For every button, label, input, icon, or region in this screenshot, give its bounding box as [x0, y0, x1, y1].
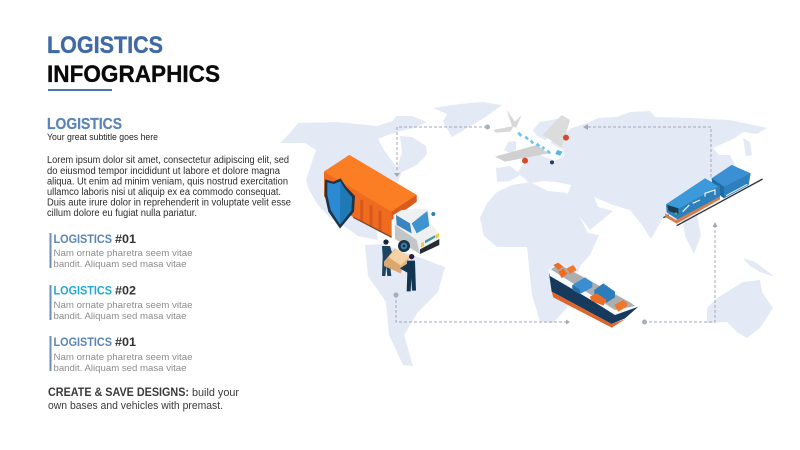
icon: shield	[325, 178, 355, 229]
engines	[563, 135, 569, 141]
map: africa	[480, 182, 599, 323]
list item 3: Nam ornate pharetra seem vitae	[54, 352, 192, 363]
icon: two workers with parcel	[382, 239, 416, 291]
list item 2	[50, 284, 192, 322]
list item 2: bandit. Aliquam sed masa vitae	[54, 311, 186, 322]
list item 2: #02	[115, 284, 136, 298]
list item 1: Nam ornate pharetra seem vitae	[54, 248, 192, 259]
route: top left dashed arrow	[394, 124, 490, 177]
body paragraph: aliqua. Ut enim ad minim veniam, quis nostrud exercitation	[47, 176, 288, 188]
fuselage	[515, 128, 564, 161]
icon: truck with shield	[324, 155, 439, 254]
section heading: LOGISTICS	[47, 116, 122, 133]
title: LOGISTICS	[47, 32, 163, 59]
list item 3: LOGISTICS	[54, 335, 112, 349]
closing note: CREATE & SAVE DESIGNS:	[48, 387, 189, 399]
body paragraph: cillum dolore eu fugiat nulla pariatur.	[47, 208, 197, 219]
map: britain	[504, 141, 516, 153]
windows	[518, 133, 550, 153]
list item 1: LOGISTICS	[54, 232, 112, 246]
wagon	[712, 165, 751, 198]
far wing	[543, 115, 570, 147]
list item 1: #01	[115, 232, 136, 246]
body paragraph: Lorem ipsum dolor sit amet, consectetur adipiscing elit, sed	[47, 155, 289, 166]
map: japan	[743, 138, 752, 156]
list item 1: bandit. Aliquam sed masa vitae	[54, 259, 186, 270]
subtitle: Your great subtitle goes here	[47, 132, 158, 142]
map: scandinavia	[533, 119, 565, 140]
icon: train	[663, 165, 763, 226]
map: new guinea	[743, 258, 775, 277]
parcel	[384, 248, 410, 273]
worker right	[400, 254, 416, 291]
list item 1	[50, 232, 192, 270]
route: bottom left dashed arrow	[394, 292, 570, 324]
cab	[393, 208, 439, 254]
title	[47, 32, 220, 88]
list item 3: bandit. Aliquam sed masa vitae	[54, 363, 186, 374]
locomotive	[665, 178, 720, 224]
body paragraph: ullamco laboris nisi ut aliquip ex ea commodo consequat.	[47, 187, 281, 198]
map: australia	[707, 280, 773, 338]
map: north america	[280, 116, 427, 240]
route: bottom right dashed arrow	[642, 222, 718, 324]
title: INFOGRAPHICS	[47, 61, 220, 88]
worker left	[382, 239, 393, 276]
icon: cargo ship	[548, 263, 638, 328]
rails	[663, 179, 763, 226]
map: eurasia	[496, 111, 767, 254]
hull	[549, 273, 638, 324]
containers	[553, 263, 628, 312]
body paragraph: Duis aute irure dolor in reprehenderit in voluptate velit esse	[47, 198, 291, 208]
cargo box	[324, 155, 417, 237]
tail fins	[507, 110, 522, 128]
world map	[280, 102, 775, 366]
icon: airplane	[493, 110, 570, 164]
closing note: build your	[192, 387, 239, 399]
closing note: own bases and vehicles with premast.	[48, 400, 223, 412]
list item 3: #01	[115, 335, 136, 349]
list item 2: Nam ornate pharetra seem vitae	[54, 300, 192, 311]
map: greenland	[433, 102, 502, 137]
map: south america	[365, 244, 445, 366]
body paragraph	[47, 155, 291, 219]
body paragraph: do eiusmod tempor incididunt ut labore et dolore magna	[47, 166, 280, 177]
route: top right dashed arrow	[583, 124, 711, 178]
closing note	[48, 387, 239, 412]
deck	[548, 263, 638, 314]
title underline	[48, 89, 112, 91]
near wing	[495, 145, 548, 162]
list item 2: LOGISTICS	[54, 284, 112, 298]
list item 3	[50, 335, 192, 374]
